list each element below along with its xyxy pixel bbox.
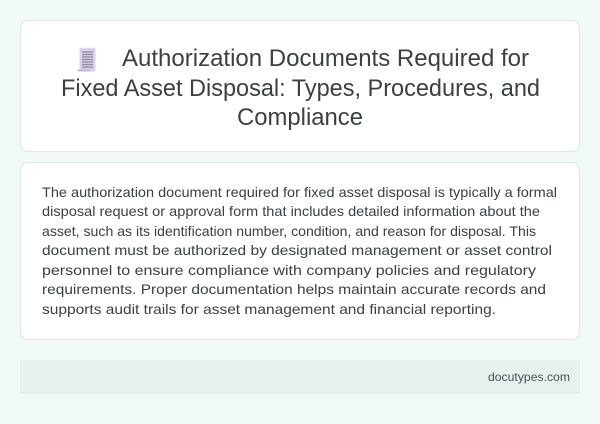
text block: description: supports audit trails for asset management and financial reporting. (42, 301, 496, 317)
panel: description card (20, 162, 580, 340)
icon: receipt document (77, 48, 96, 72)
text block: description: disposal request or approval form that includes detailed information about the (42, 203, 540, 219)
text block: description: The authorization document required for fixed asset disposal is typically a formal (42, 184, 557, 200)
text block: description: asset, such as its identification number, condition, and reason for disposal. This (42, 223, 536, 239)
text block: description: document must be authorized by designated management or asset control (42, 242, 552, 258)
footer band (20, 360, 580, 394)
heading: title: Authorization Documents Required for (122, 45, 529, 72)
heading: title (61, 45, 540, 131)
panel: title card (20, 20, 580, 152)
heading: title: Fixed Asset Disposal: Types, Procedures, and (61, 75, 540, 102)
text block: description: personnel to ensure compliance with company policies and regulatory (42, 262, 536, 278)
footer text: site name: docutypes.com (488, 370, 570, 384)
heading: title: Compliance (237, 104, 363, 131)
text block: description: requirements. Proper documentation helps maintain accurate records and (42, 281, 546, 297)
